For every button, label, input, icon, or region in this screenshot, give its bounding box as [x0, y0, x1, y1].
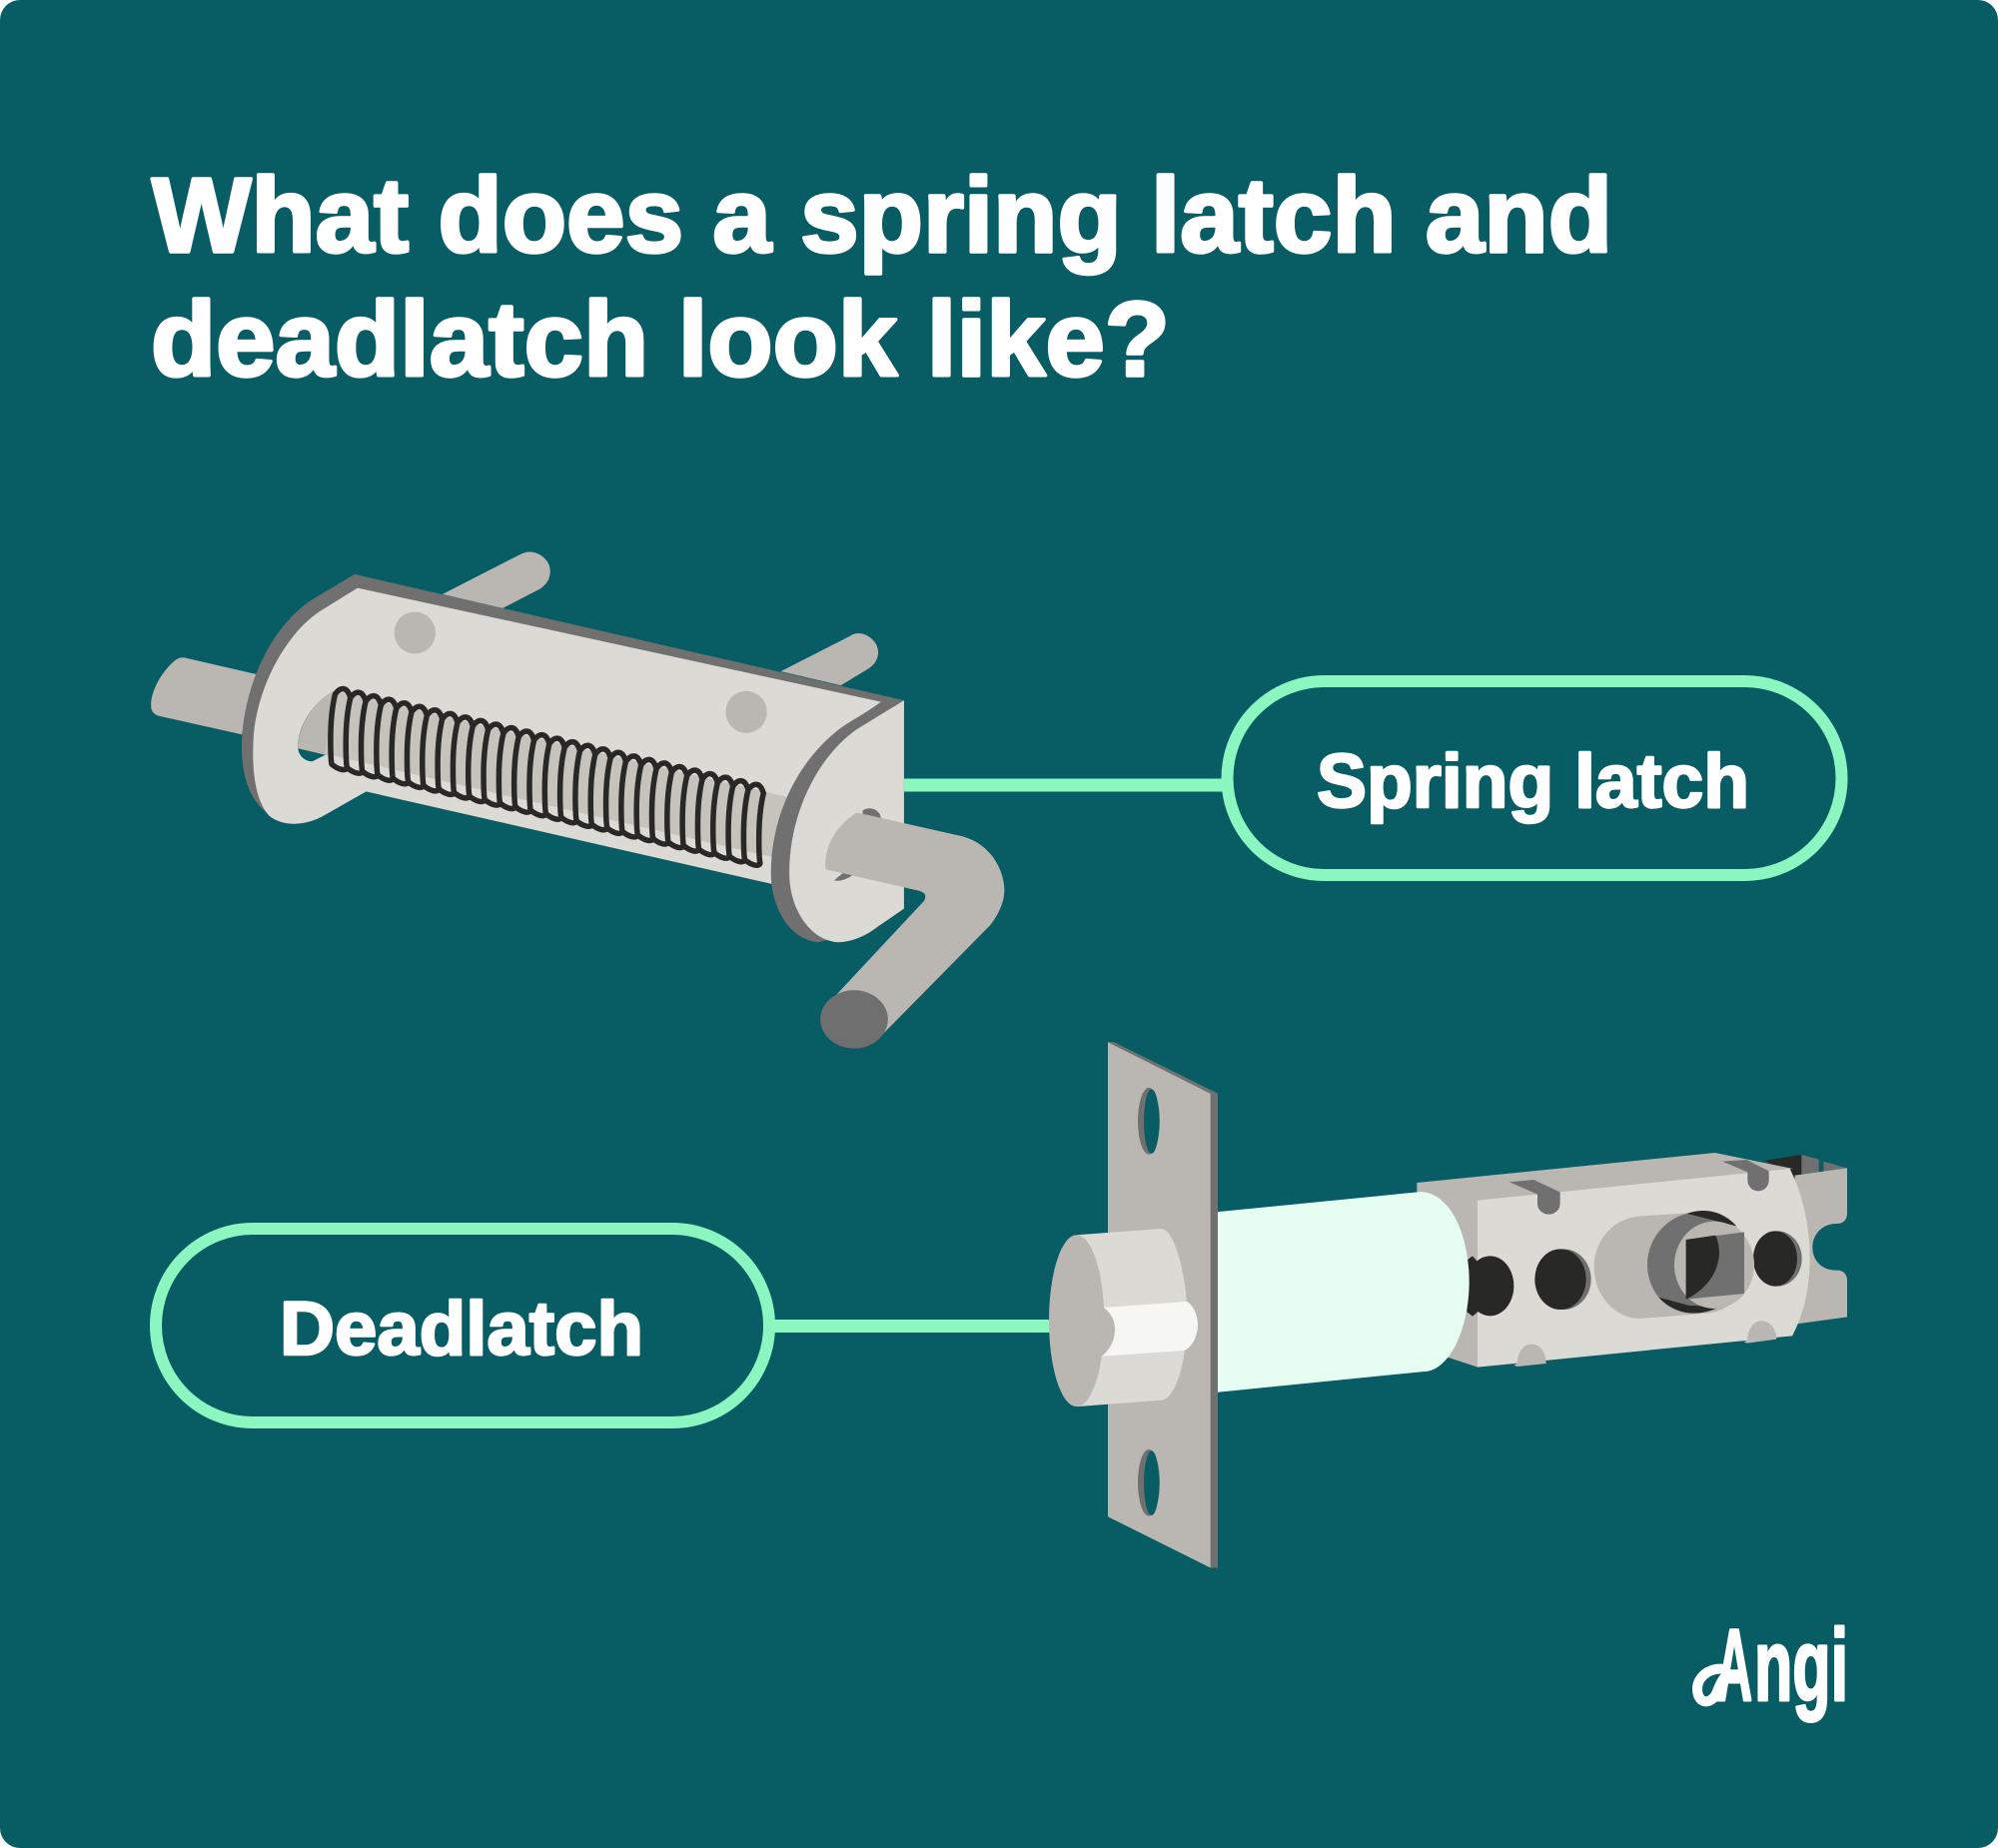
- rod end: [820, 990, 888, 1049]
- illustration: deadlatch housing: [1417, 1153, 1847, 1368]
- housing rear edge: [242, 574, 904, 817]
- bottom tab: [1513, 1345, 1546, 1367]
- square drive: [1686, 1232, 1744, 1300]
- rear pins: [443, 551, 878, 685]
- faceplate edge: [1108, 1042, 1218, 1568]
- spindle inner circle: [1674, 1222, 1754, 1309]
- connector line: deadlatch: [769, 1320, 1059, 1333]
- hole: middle: [1534, 1249, 1591, 1310]
- rivet: [725, 691, 767, 733]
- latch bolt end face: [1049, 1235, 1115, 1406]
- callout pill: spring latch: Spring latch: [1317, 739, 1749, 824]
- mint barrel: [1218, 1192, 1470, 1392]
- screw hole: bottom: [1138, 1449, 1160, 1516]
- screw hole: top: [1138, 1088, 1160, 1155]
- spindle grey crescent: [1647, 1214, 1731, 1307]
- logo: Angi: [1697, 1608, 1848, 1722]
- spindle capsule: [1594, 1212, 1754, 1319]
- rod hole: [834, 808, 881, 881]
- title: What does a spring latch and: [152, 157, 1612, 275]
- housing top and side: [1417, 1153, 1793, 1368]
- callout pill: spring latch: [1227, 681, 1842, 875]
- connector line: spring latch: [904, 779, 1229, 791]
- callout pill: deadlatch: [156, 1229, 769, 1422]
- callout pill: deadlatch: Deadlatch: [280, 1287, 643, 1372]
- rivet: [395, 611, 436, 654]
- title: deadlatch look like?: [151, 281, 1170, 399]
- faceplate: [1108, 1042, 1218, 1568]
- spindle black slivers: [1658, 1211, 1736, 1314]
- right flange face: [789, 700, 904, 942]
- hole: left: [1467, 1256, 1513, 1317]
- bent handle rod: [825, 812, 1004, 1035]
- top tab: [1722, 1160, 1769, 1191]
- logo: Angi: ngi: [1754, 1608, 1848, 1722]
- top tab: [1509, 1180, 1560, 1215]
- spring rod: [325, 690, 789, 857]
- spring coil: [331, 689, 763, 865]
- right flange edge: [771, 700, 904, 942]
- housing front face: [1478, 1169, 1810, 1368]
- slot opening: [298, 690, 342, 761]
- left shaft: [151, 657, 259, 734]
- rear tail piece: [1765, 1155, 1847, 1325]
- logo swash: [1697, 1669, 1727, 1701]
- slot inner wall: [298, 690, 342, 755]
- illustration: deadlatch front: [1049, 1042, 1470, 1568]
- title: [151, 157, 1612, 399]
- bottom tab: [1744, 1321, 1776, 1344]
- illustration: spring latch: [151, 551, 1004, 1049]
- housing front face: [253, 588, 881, 885]
- logo: Angi: A: [1716, 1608, 1752, 1722]
- latch bolt ridge: [1102, 1302, 1198, 1357]
- square drive shadow: [1686, 1236, 1719, 1300]
- latch bolt body: [1077, 1229, 1187, 1406]
- hole: right: [1753, 1231, 1802, 1287]
